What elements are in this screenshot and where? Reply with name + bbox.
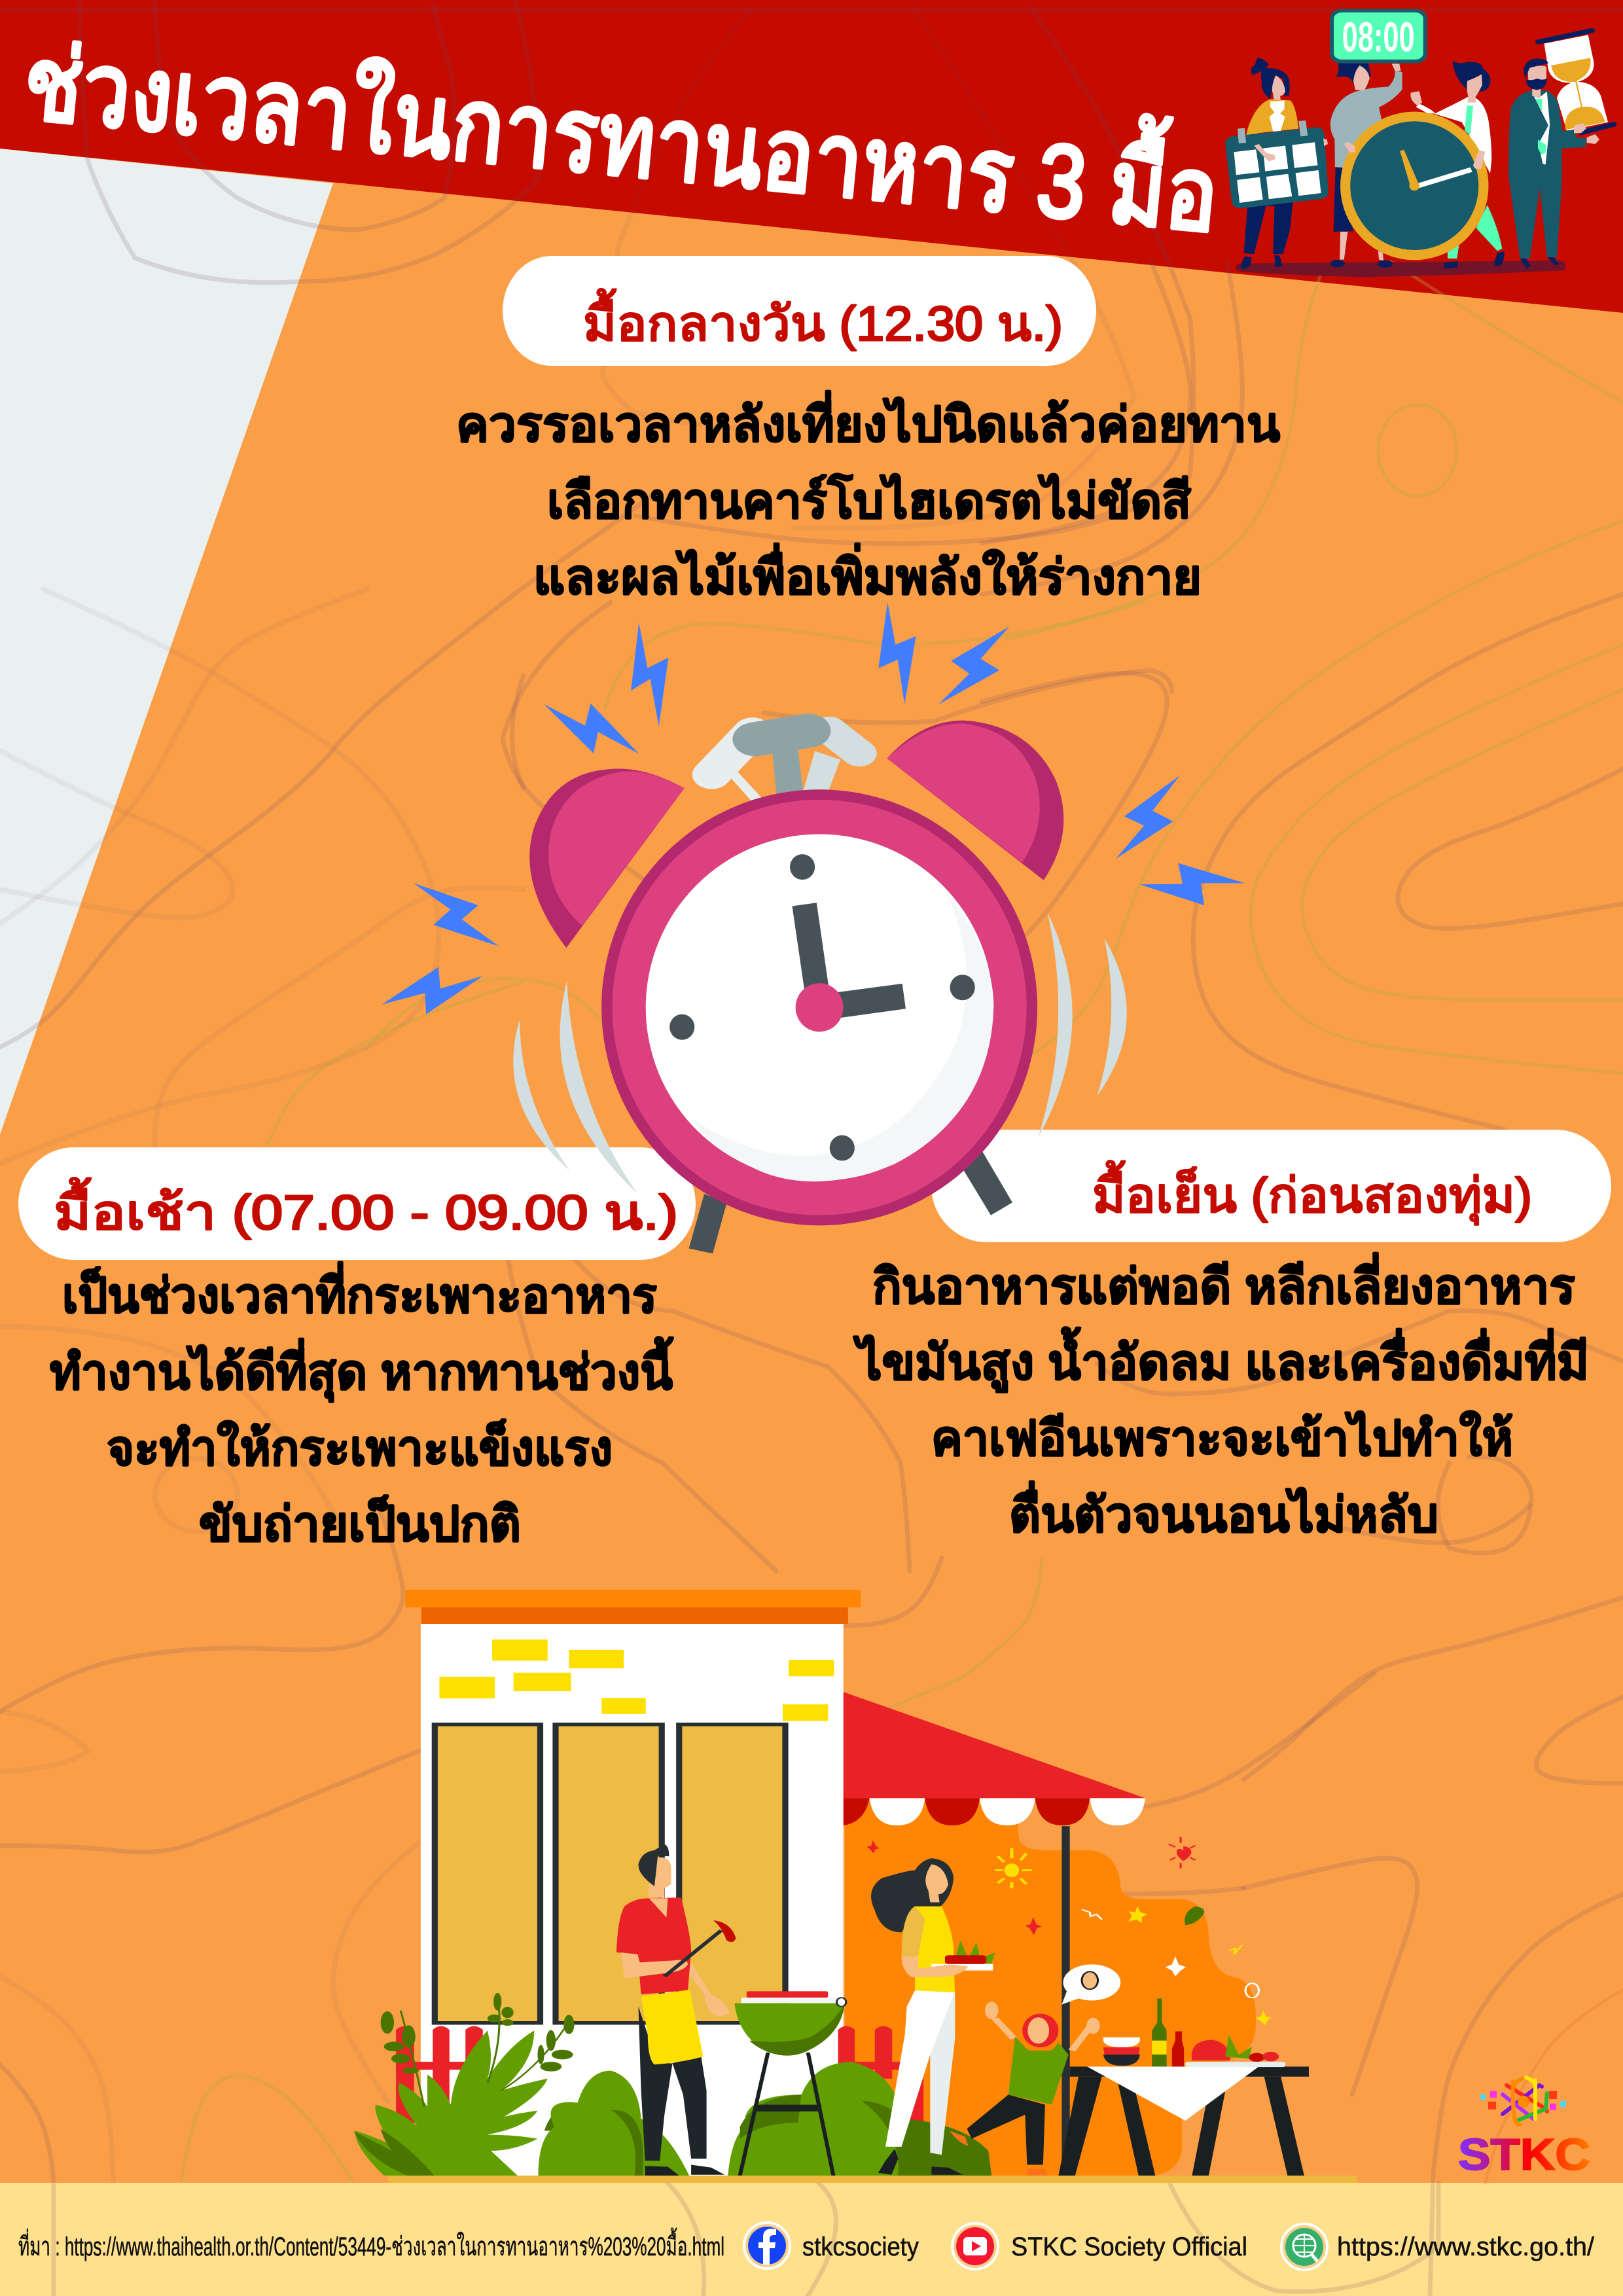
logo emblem [1503, 2077, 1547, 2125]
child [950, 2001, 1100, 2177]
text: morning description: ขับถ่ายเป็นปกติ [199, 1496, 521, 1551]
icon: facebook [744, 2223, 790, 2269]
man grilling [616, 1844, 736, 2176]
motion arcs [513, 913, 1127, 1194]
text: evening description: ไขมันสูง น้ำอัดลม และเครื่องดื่มที่มี [854, 1327, 1589, 1392]
ground strip [388, 2176, 1357, 2183]
pill: midday heading: มื้อกลางวัน (12.30 น.) [583, 289, 1063, 351]
pill: morning heading: มื้อเช้า (07.00 - 09.00 น.) [54, 1177, 678, 1240]
digital clock sign [1330, 9, 1427, 63]
label: youtube: STKC Society Official [1011, 2233, 1247, 2261]
table and food [1058, 1998, 1309, 2176]
plant [354, 1993, 575, 2176]
speech bubble [1061, 1964, 1120, 2005]
text: evening description: ตื่นตัวจนนอนไม่หลับ [1009, 1481, 1438, 1542]
family barbecue illustration [354, 1590, 1309, 2177]
house [405, 1590, 861, 2176]
pill: midday heading [503, 256, 1096, 366]
orange back wall [845, 1798, 1256, 2176]
text: evening description: คาเฟอีนเพราะจะเข้าไปทำให้ [931, 1411, 1513, 1465]
grey corner shape [0, 149, 333, 1134]
icon: youtube [952, 2223, 998, 2269]
text: evening description: กินอาหารแต่พอดี หลีกเลี่ยงอาหาร [872, 1253, 1575, 1314]
alarm clock illustration [382, 602, 1245, 1253]
text: midday description: และผลไม้เพื่อเพิ่มพลังให้ร่างกาย [533, 543, 1202, 604]
label: facebook: stkcsociety [802, 2233, 919, 2261]
man in suit holding hourglass [1508, 31, 1614, 268]
pill: morning heading [18, 1147, 696, 1260]
woman with plate [871, 1858, 995, 2175]
text: morning description: เป็นช่วงเวลาที่กระเพาะอาหาร [62, 1262, 657, 1323]
logo wordmark: STKC [1458, 2130, 1590, 2179]
footer band [0, 2183, 1623, 2296]
bells [529, 721, 1063, 948]
icon: website [1281, 2224, 1327, 2270]
grill [734, 1991, 846, 2176]
STKC logo [1458, 2077, 1590, 2179]
text: midday description: ควรรอเวลาหลังเที่ยงไปนิดแล้วค่อยทาน [456, 391, 1280, 452]
fence [396, 2026, 923, 2126]
text: midday description [456, 391, 1280, 604]
bushes [538, 2062, 991, 2176]
text: midday description: เลือกทานคาร์โบไฮเดรตไม่ขัดสี [547, 474, 1191, 528]
man in grey sweater holding 08:00 sign [1330, 9, 1427, 268]
pill: evening heading: มื้อเย็น (ก่อนสองทุ่ม) [1092, 1160, 1532, 1225]
legs [689, 1151, 1012, 1253]
text: morning description [50, 1262, 673, 1551]
label: website: https://www.stkc.go.th/ [1337, 2233, 1595, 2261]
source text: ที่มา : https://www.thaihealth.or.th/Content/53449-ช่วงเวลาในการทานอาหาร%203%20มื้อ.html [18, 2227, 724, 2261]
wall doodles [866, 1837, 1272, 2025]
man in white coat [1410, 61, 1505, 269]
title: ช่วงเวลาในการทานอาหาร 3 มื้อ [19, 9, 1225, 254]
clock body and face [601, 789, 1037, 1225]
red header band [0, 0, 1623, 313]
pill: evening heading [931, 1130, 1611, 1242]
text: morning description: ทำงานได้ดีที่สุด หากทานช่วงนี้ [50, 1337, 673, 1402]
woman holding calendar [1225, 58, 1329, 269]
awning [844, 1692, 1145, 1825]
digital clock sign: 08:00 [1342, 13, 1415, 60]
ground shadow [1236, 260, 1565, 277]
hammer [711, 730, 859, 802]
text: morning description: จะทำให้กระเพาะแข็งแรง [107, 1420, 613, 1475]
header illustration: people with clock [1225, 9, 1614, 277]
large wall clock [1340, 112, 1488, 260]
text: evening description [854, 1253, 1589, 1542]
lightning bolts [382, 602, 1245, 1014]
